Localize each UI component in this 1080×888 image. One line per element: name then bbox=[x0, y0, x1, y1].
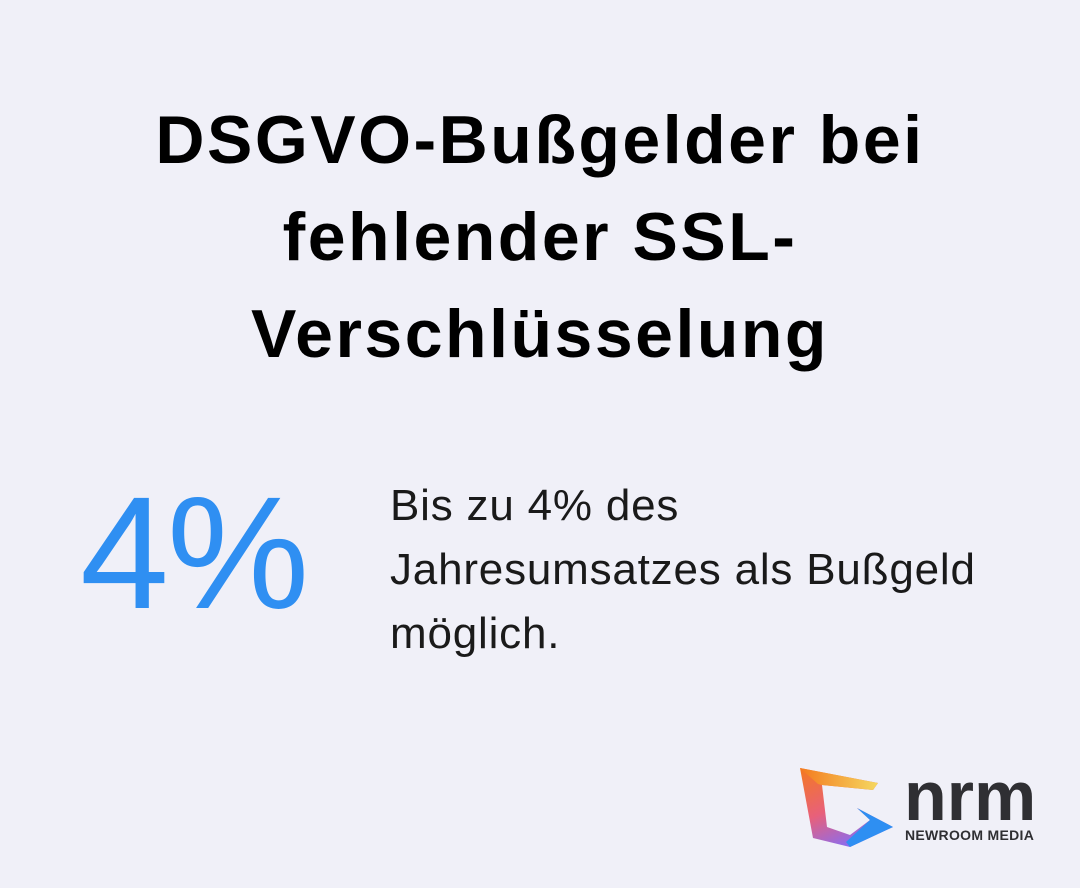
logo: newroom media bbox=[800, 764, 1036, 847]
big stat: 4%: 4% bbox=[80, 463, 307, 642]
title: fehlender SSL- bbox=[283, 199, 797, 275]
logo text: NEWROOM MEDIA bbox=[905, 827, 1034, 843]
description text: Bis zu 4% des bbox=[390, 481, 679, 530]
description text: Jahresumsatzes als Bußgeld bbox=[390, 545, 976, 594]
title: Verschlüsselung bbox=[251, 296, 829, 372]
description text bbox=[390, 481, 976, 658]
icon: bracket bbox=[800, 768, 893, 847]
title: DSGVO-Bußgelder bei bbox=[155, 102, 925, 178]
title bbox=[155, 102, 925, 372]
description text: möglich. bbox=[390, 609, 560, 658]
